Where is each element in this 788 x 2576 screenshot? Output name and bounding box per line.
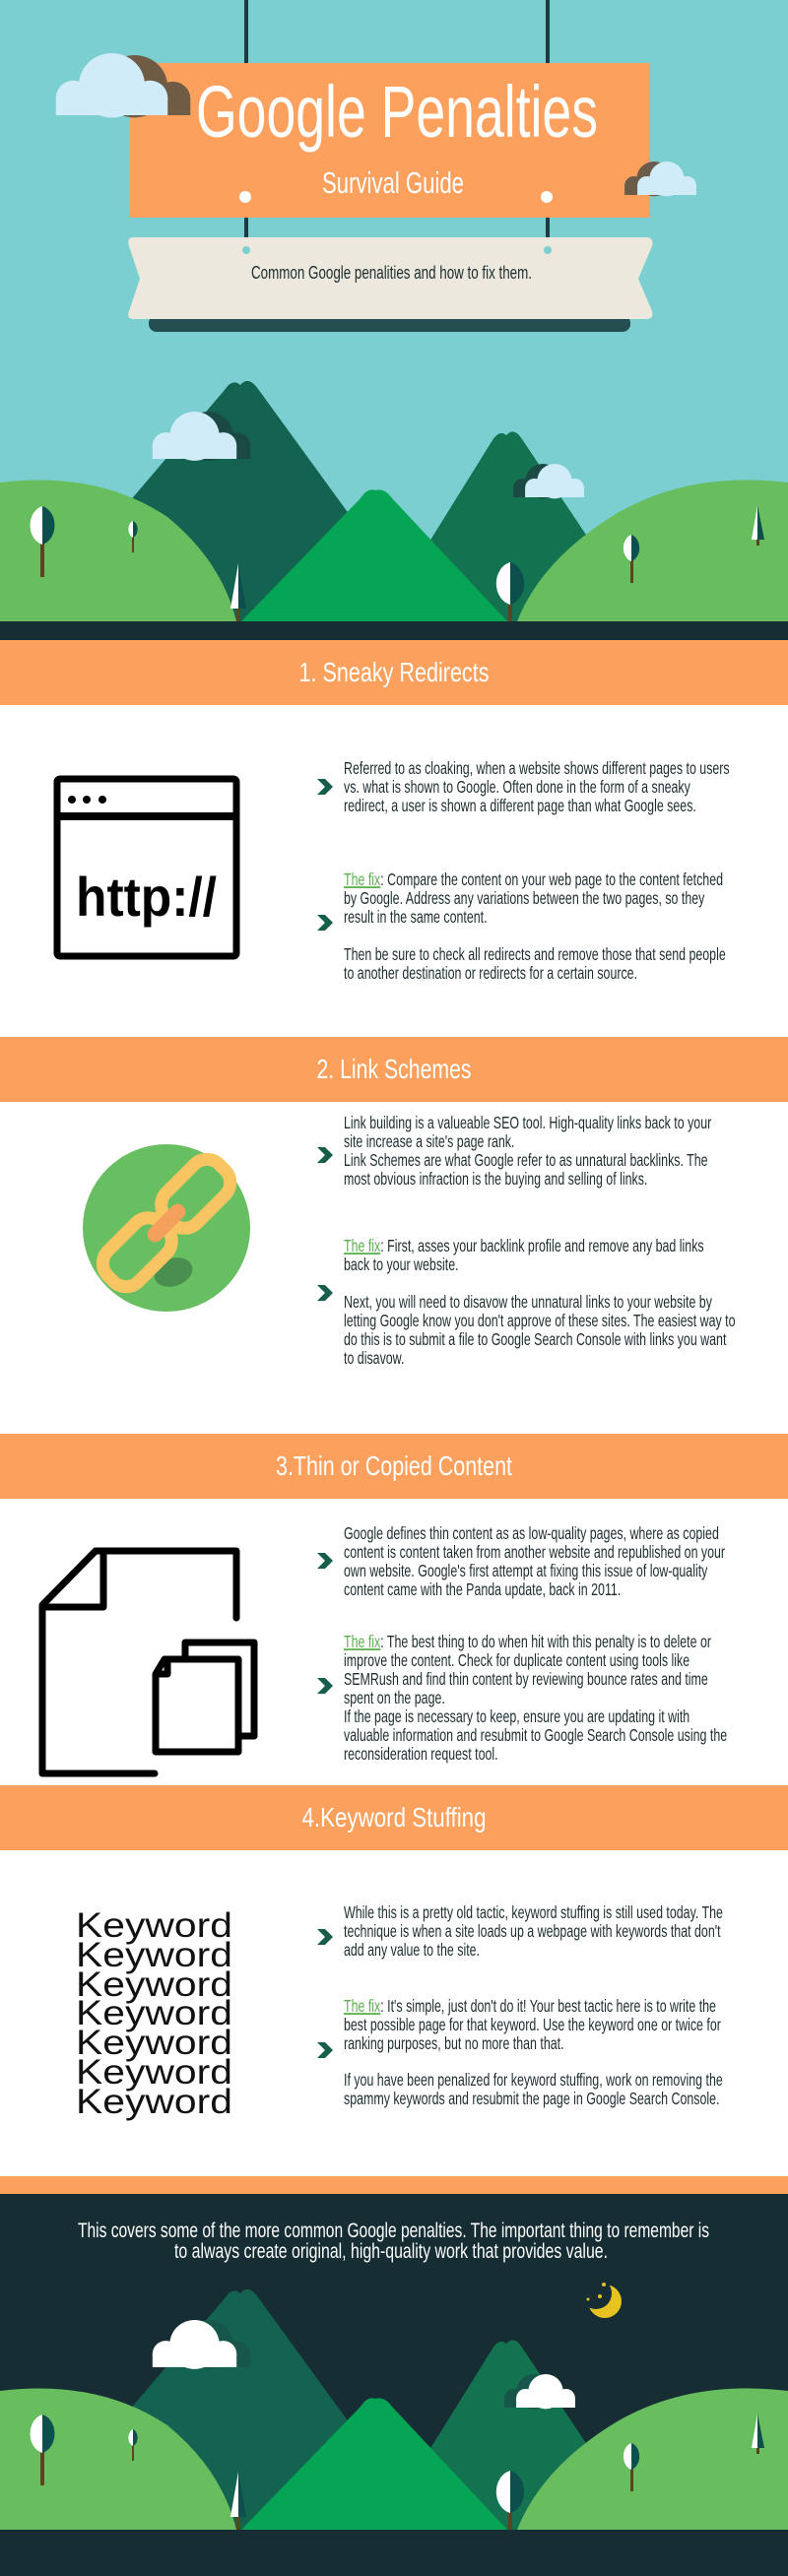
text: keyword stuffing: While this is a pretty old tactic, keyword stuffing is still used today. The: [344, 1903, 723, 1923]
section 4 header: 4.Keyword Stuffing: [301, 1802, 487, 1833]
icon: keyword stack: Keyword: [76, 1965, 232, 2004]
section 4 header: [0, 1785, 788, 1850]
text: link schemes: do this is to submit a file to Google Search Console with links you want: [344, 1330, 727, 1350]
header sky: [0, 0, 788, 640]
text: thin content: improve the content. Check for duplicate content using tools like: [344, 1651, 690, 1671]
icon: moon: [580, 2278, 622, 2318]
footer: [0, 2194, 788, 2576]
banner text: Common Google penalities and how to fix them.: [251, 263, 532, 283]
text: sneaky redirects: by Google. Address any variations between the two pages, so they: [344, 889, 705, 909]
icon: keyword stack: Keyword: [76, 2083, 232, 2121]
text: link schemes: The fix: First, asses your backlink profile and remove any bad links: [344, 1237, 704, 1256]
text: thin content: content is content taken from another website and republished on your: [344, 1543, 725, 1563]
cloud: top left: [56, 53, 190, 118]
section 3 header: 3.Thin or Copied Content: [276, 1450, 512, 1481]
icon: documents: [42, 1551, 254, 1773]
section 2 header: [0, 1037, 788, 1102]
text: sneaky redirects: Referred to as cloaking, when a website shows different pages to users: [344, 759, 730, 779]
text: thin content: The fix: The best thing to do when hit with this penalty is to delete or: [344, 1633, 711, 1652]
footer clouds: [153, 2320, 575, 2409]
text: keyword stuffing: [317, 1903, 723, 2109]
text: sneaky redirects: vs. what is shown to Google. Often done in the form of a sneaky: [344, 778, 690, 798]
trees: [31, 505, 764, 622]
icon: keyword stack: Keyword: [76, 1906, 232, 1945]
cloud: right small: [624, 161, 696, 196]
subtitle: Survival Guide: [322, 165, 464, 200]
text: thin content: content came with the Panda update, back in 2011.: [344, 1580, 621, 1600]
icon: keyword stack: Keyword: [76, 1994, 232, 2032]
icon: browser http: http://: [76, 866, 217, 928]
title sign: [130, 63, 650, 218]
text: link schemes: most obvious infraction is the buying and selling of links.: [344, 1170, 647, 1190]
text: keyword stuffing: best possible page for that keyword. Use the keyword one or twice for: [344, 2016, 721, 2035]
text: sneaky redirects: Then be sure to check all redirects and remove those that send people: [344, 945, 726, 965]
text: keyword stuffing: add any value to the site.: [344, 1941, 480, 1961]
text: link schemes: letting Google know you don't approve of these sites. The easiest way to: [344, 1312, 735, 1331]
icon: keyword stack: Keyword: [76, 1936, 232, 1974]
title: Google Penalties: [196, 71, 598, 153]
text: link schemes: site increase a site's page rank.: [344, 1132, 514, 1152]
text: link schemes: back to your website.: [344, 1256, 459, 1275]
icon: keyword stack: [76, 1906, 232, 2121]
icon: keyword stack: Keyword: [76, 2053, 232, 2092]
footer landscape: [0, 2289, 788, 2539]
text: sneaky redirects: to another destination or redirects for a certain source.: [344, 964, 637, 984]
text: sneaky redirects: result in the same content.: [344, 908, 488, 928]
text: thin content: [317, 1524, 727, 1765]
text: thin content: Google defines thin content as as low-quality pages, where as copied: [344, 1524, 719, 1544]
text: link schemes: Next, you will need to disavow the unnatural links to your website by: [344, 1293, 712, 1313]
text: keyword stuffing: technique is when a site loads up a webpage with keywords that don't: [344, 1922, 721, 1942]
text: keyword stuffing: The fix: It's simple, just don't do it! Your best tactic here is to write the: [344, 1997, 716, 2017]
text: keyword stuffing: ranking purposes, but no more than that.: [344, 2034, 564, 2054]
section 1 header: [0, 640, 788, 705]
footer text: to always create original, high-quality work that provides value.: [174, 2240, 608, 2263]
icon: keyword stack: Keyword: [76, 2024, 232, 2062]
icon: chain link: [83, 1144, 250, 1312]
text: sneaky redirects: The fix: Compare the content on your web page to the content fetched: [344, 870, 723, 890]
ropes: [244, 0, 550, 253]
text: link schemes: Link Schemes are what Google refer to as unnatural backlinks. The: [344, 1151, 708, 1171]
text: thin content: reconsideration request tool.: [344, 1745, 498, 1765]
header landscape: [0, 381, 788, 630]
text: link schemes: to disavow.: [344, 1349, 404, 1369]
text: keyword stuffing: If you have been penalized for keyword stuffing, work on removing the: [344, 2071, 723, 2091]
icon: browser http: [57, 779, 236, 956]
footer text: [78, 2220, 709, 2263]
text: thin content: own website. Google's first attempt at fixing this issue of low-quality: [344, 1562, 708, 1581]
section 3 header: [0, 1434, 788, 1499]
text: thin content: If the page is necessary to keep, ensure you are updating it with: [344, 1707, 690, 1727]
text: thin content: spent on the page.: [344, 1689, 445, 1708]
text: thin content: valuable information and resubmit to Google Search Console using the: [344, 1726, 727, 1746]
banner: [128, 237, 652, 332]
text: link schemes: [317, 1114, 735, 1369]
text: sneaky redirects: redirect, a user is shown a different page than what Google sees.: [344, 797, 696, 816]
section 2 header: 2. Link Schemes: [317, 1054, 471, 1084]
section 1 header: 1. Sneaky Redirects: [299, 657, 489, 687]
text: sneaky redirects: [317, 759, 730, 984]
text: keyword stuffing: spammy keywords and resubmit the page in Google Search Console.: [344, 2090, 720, 2109]
text: link schemes: Link building is a valueable SEO tool. High-quality links back to your: [344, 1114, 711, 1133]
cloud: mountain right: [513, 464, 584, 498]
cloud: mountain left: [153, 412, 250, 461]
text: thin content: SEMRush and find thin content by reviewing bounce rates and time: [344, 1670, 708, 1690]
